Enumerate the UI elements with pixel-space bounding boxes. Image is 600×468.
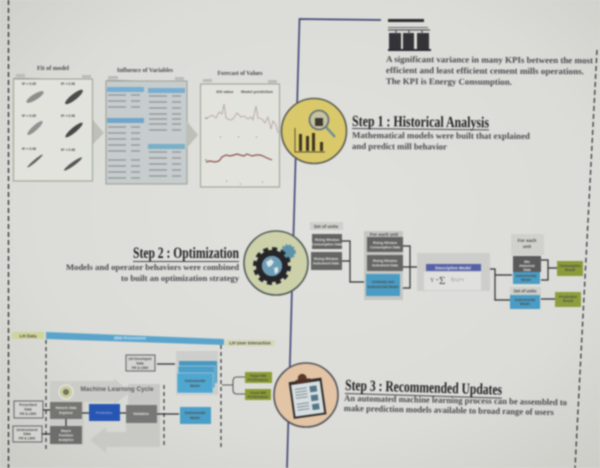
block: per-unit output	[511, 234, 544, 284]
machine learning cycle: Machine Learning Cycle	[80, 386, 154, 393]
chart: fit of model	[14, 65, 92, 181]
step 2 body text: Models and operator behaviors were combined	[66, 262, 239, 272]
inputs: set of units: Rising Window	[314, 257, 338, 261]
block: per-unit output: Historical	[519, 264, 535, 268]
block: set of units output	[510, 287, 541, 309]
block: for each unit	[364, 231, 403, 300]
machine learning cycle: Function	[59, 434, 73, 438]
inputs: set of units: Instrument Data	[313, 262, 339, 266]
intro text block: efficient and least efficient cement mills operations.	[386, 65, 584, 76]
chart: forecast of values: Model prediction	[241, 89, 274, 94]
panel: historical analysis charts	[14, 65, 280, 187]
block: for each unit: For each unit	[370, 232, 399, 237]
flowchart: optimization	[310, 222, 583, 309]
output: cross mill	[245, 389, 271, 400]
block: per-unit output: unit	[523, 244, 532, 249]
flowchart: machine learning process	[12, 332, 275, 453]
arrow	[186, 120, 198, 149]
block: descriptive model: Σ	[439, 275, 445, 287]
block: descriptive model	[417, 253, 490, 291]
machine learning cycle: Validation	[133, 412, 149, 416]
icon: step 2 gears	[244, 231, 308, 295]
chart: fit of model: Fit of model	[37, 65, 69, 72]
block: for each unit: Consumption Data	[370, 246, 400, 250]
output: green box top: Result	[565, 268, 576, 272]
input: developed data	[126, 355, 155, 371]
chart: forecast of values: Forecast of Values	[218, 70, 263, 77]
chart: fit of model: R² = 0.95	[22, 82, 36, 86]
intro text block	[386, 54, 593, 87]
input: historical data: FR & LWH	[20, 412, 37, 416]
block: per-unit output: Instrumental	[516, 274, 536, 278]
icon: step 1 magnifier and bars	[282, 98, 346, 164]
column header: LH data: LH Data	[19, 334, 37, 338]
input: developed data: Data	[136, 362, 144, 366]
output: green box top	[557, 261, 583, 276]
chart: fit of model: R² = 0.96	[61, 82, 75, 86]
step 1 heading: Step 1 : Historical Analysis	[352, 113, 489, 131]
block: for each unit: Instrumental Model	[367, 285, 399, 289]
model block: Instrumental	[185, 411, 205, 415]
chart: influence of variables: Influence of Variables	[117, 67, 173, 74]
model stack	[176, 351, 218, 395]
machine learning cycle: Bayes	[61, 429, 71, 433]
output: green box top: Consumption	[559, 264, 581, 268]
model stack: Model	[190, 384, 200, 388]
connectors	[342, 241, 557, 300]
intro text block: A significant variance in many KPIs between the most	[386, 54, 593, 65]
output: target mill: Target Mill	[250, 374, 266, 378]
input: unstructured data: Data	[23, 432, 31, 436]
machine learning cycle: Historic Data	[56, 406, 77, 410]
chart: fit of model: R² = 0.95	[22, 114, 36, 118]
input: historical data: Prescribed	[19, 403, 37, 407]
step 2 body text	[66, 262, 240, 283]
step 1 body text	[352, 130, 530, 152]
chart: forecast of values	[200, 70, 280, 187]
step 3 heading: Step 3 : Recommended Updates	[345, 377, 502, 399]
column header: user interaction: LH User Interaction	[229, 340, 271, 346]
output: green box bottom: Result	[563, 299, 574, 303]
icon: cement silos	[388, 19, 431, 51]
block: for each unit: Rising Window	[373, 259, 397, 263]
chart: fit of model: R² = 0.96	[61, 114, 75, 118]
input: unstructured data	[13, 426, 42, 442]
column header: IBM processes	[46, 332, 224, 345]
block: descriptive model: f(xᵢ)+ε	[451, 278, 464, 283]
chart: influence of variables	[106, 67, 187, 184]
block: per-unit output: For each	[518, 238, 537, 243]
step 3 heading	[345, 377, 502, 399]
step 3 body text	[344, 393, 568, 417]
icon: step 3 clipboard	[274, 363, 338, 427]
machine learning cycle: Analytics	[58, 438, 74, 442]
output: green box bottom	[555, 292, 581, 307]
block: per-unit output: Data	[523, 268, 531, 272]
step 1 body text: and predict mill behavior	[352, 141, 447, 151]
inputs: set of units	[310, 222, 343, 270]
model stack: Instrumental	[185, 379, 205, 383]
output: target mill	[245, 372, 272, 383]
model block: Model	[190, 416, 200, 420]
chart: forecast of values: EN value	[217, 89, 234, 94]
input: historical data	[14, 401, 43, 418]
machine learning cycle: Explorer	[59, 411, 74, 415]
machine learning cycle: Prediction	[96, 411, 112, 415]
inputs: set of units: Set of units	[314, 224, 339, 229]
block: per-unit output: Min	[524, 260, 530, 264]
chart: fit of model: R² = 0.98	[61, 148, 75, 152]
step 2 heading: Step 2 : Optimization	[133, 245, 239, 262]
step 3 body text: make prediction models available to broad range of users	[344, 403, 554, 417]
block: descriptive model: Descriptive Model	[435, 266, 471, 270]
input: unstructured data: FR & LWH	[19, 436, 36, 440]
input: developed data: FR & LWH	[132, 366, 149, 370]
inputs: set of units: Consumption Data	[312, 242, 342, 246]
timeline line	[287, 19, 381, 468]
block: set of units output: Instrumental	[515, 298, 535, 302]
chart: fit of model: R² = 0.98	[22, 147, 36, 151]
input: developed data: UH Developed	[128, 357, 152, 361]
block: set of units output: Model	[520, 302, 530, 306]
block: descriptive model: Y =	[430, 278, 440, 284]
machine learning cycle	[50, 378, 160, 453]
input: historical data: Data	[24, 408, 32, 412]
column header: user interaction	[225, 340, 275, 346]
output: cross mill: Cross Mill	[250, 391, 266, 395]
step 2 body text: to built an optimization strategy	[121, 273, 240, 283]
intro text block: The KPI is Energy Consumption.	[386, 76, 512, 87]
input: unstructured data: Unstructured	[16, 428, 38, 432]
block: for each unit: Unsteady and	[372, 280, 394, 284]
step 1 body text: Mathematical models were built that explained	[352, 130, 530, 141]
output: green box bottom: Production	[559, 295, 577, 299]
block: for each unit: Rising Window	[373, 241, 397, 245]
model block	[180, 407, 211, 424]
step 3 body text: An automated machine learning process can be assembled to	[344, 393, 568, 407]
column header: IBM processes: IBM Processes	[114, 336, 146, 340]
block: set of units output: Set of units	[514, 288, 537, 294]
output: target mill: Performance	[248, 378, 268, 382]
output: cross mill: Performance	[248, 395, 268, 399]
arrow	[93, 120, 104, 144]
block: for each unit: Instrument Data	[372, 264, 398, 268]
block: per-unit output: Model	[521, 278, 531, 282]
inputs: set of units: Rising Window	[315, 238, 339, 242]
column header: LH data	[12, 332, 44, 339]
